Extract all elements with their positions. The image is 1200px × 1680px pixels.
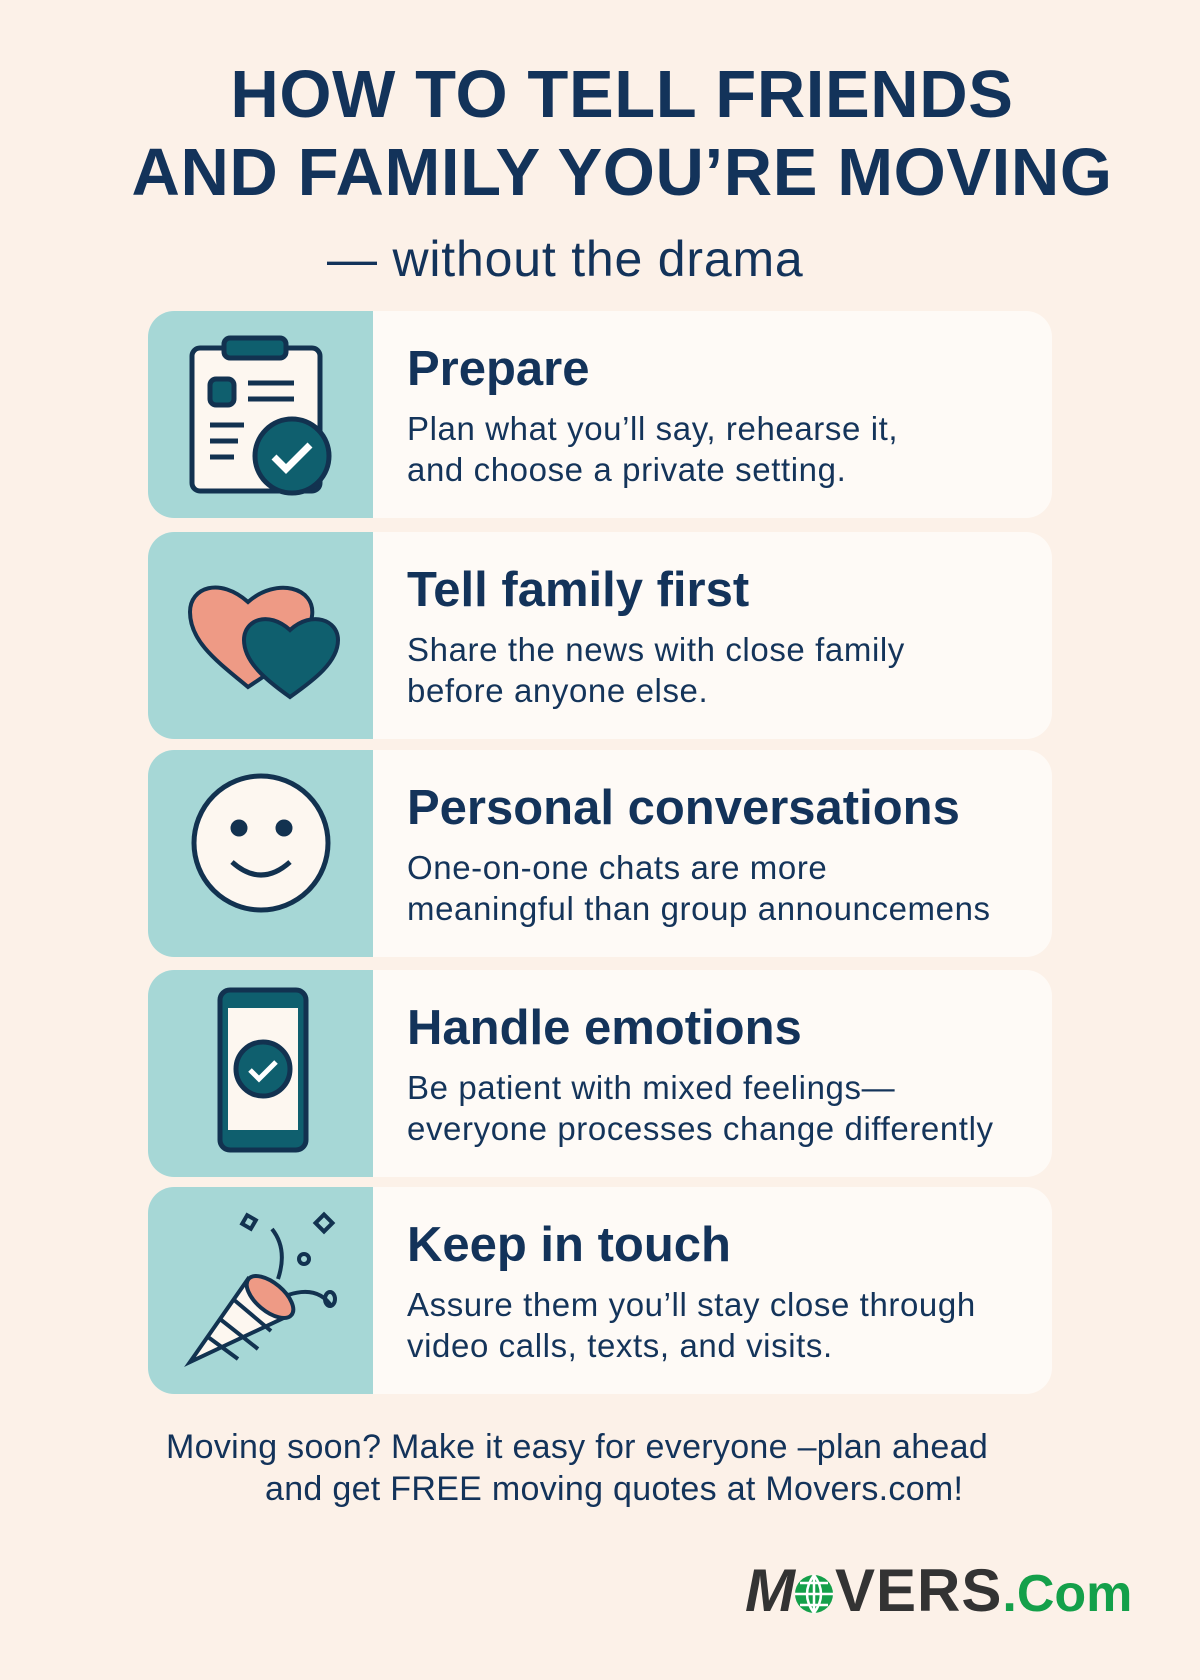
text: Plan what you’ll say, rehearse it, bbox=[407, 410, 898, 447]
heading: Prepare bbox=[407, 342, 590, 396]
text bbox=[407, 1069, 994, 1147]
text: video calls, texts, and visits. bbox=[407, 1327, 833, 1364]
footer text: and get FREE moving quotes at Movers.com! bbox=[265, 1470, 963, 1508]
logo: M VERS.Com bbox=[745, 1557, 1132, 1624]
text: Assure them you’ll stay close through bbox=[407, 1286, 976, 1323]
text: Be patient with mixed feelings— bbox=[407, 1069, 895, 1106]
title: AND FAMILY YOU’RE MOVING bbox=[131, 135, 1113, 210]
heading: Handle emotions bbox=[407, 1001, 802, 1055]
heading: Tell family first bbox=[407, 563, 749, 617]
text: One-on-one chats are more bbox=[407, 849, 827, 886]
panel: handle emotions bbox=[148, 970, 1052, 1177]
panel: tell family bbox=[148, 532, 1052, 739]
icon: smiley bbox=[148, 750, 373, 957]
heading: Keep in touch bbox=[407, 1218, 731, 1272]
icon: phone bbox=[148, 970, 373, 1177]
text bbox=[407, 849, 991, 927]
footer text bbox=[166, 1428, 988, 1508]
subtitle: — without the drama bbox=[327, 231, 804, 287]
text: Share the news with close family bbox=[407, 631, 905, 668]
icon: hearts bbox=[148, 532, 373, 739]
text bbox=[407, 631, 905, 709]
text: before anyone else. bbox=[407, 672, 708, 709]
panel: personal conversations bbox=[148, 750, 1052, 957]
icon: clipboard bbox=[148, 311, 373, 518]
text: meaningful than group announcemens bbox=[407, 890, 991, 927]
text bbox=[407, 1286, 976, 1364]
panel: keep in touch bbox=[148, 1187, 1052, 1394]
footer text: Moving soon? Make it easy for everyone –plan ahead bbox=[166, 1428, 988, 1466]
panel: prepare bbox=[148, 311, 1052, 518]
icon: party popper bbox=[148, 1187, 373, 1394]
title: HOW TO TELL FRIENDS bbox=[230, 57, 1014, 132]
title bbox=[131, 57, 1113, 210]
text: and choose a private setting. bbox=[407, 451, 846, 488]
text: everyone processes change differently bbox=[407, 1110, 994, 1147]
icon: globe bbox=[795, 1574, 833, 1614]
text bbox=[407, 410, 898, 488]
heading: Personal conversations bbox=[407, 781, 960, 835]
